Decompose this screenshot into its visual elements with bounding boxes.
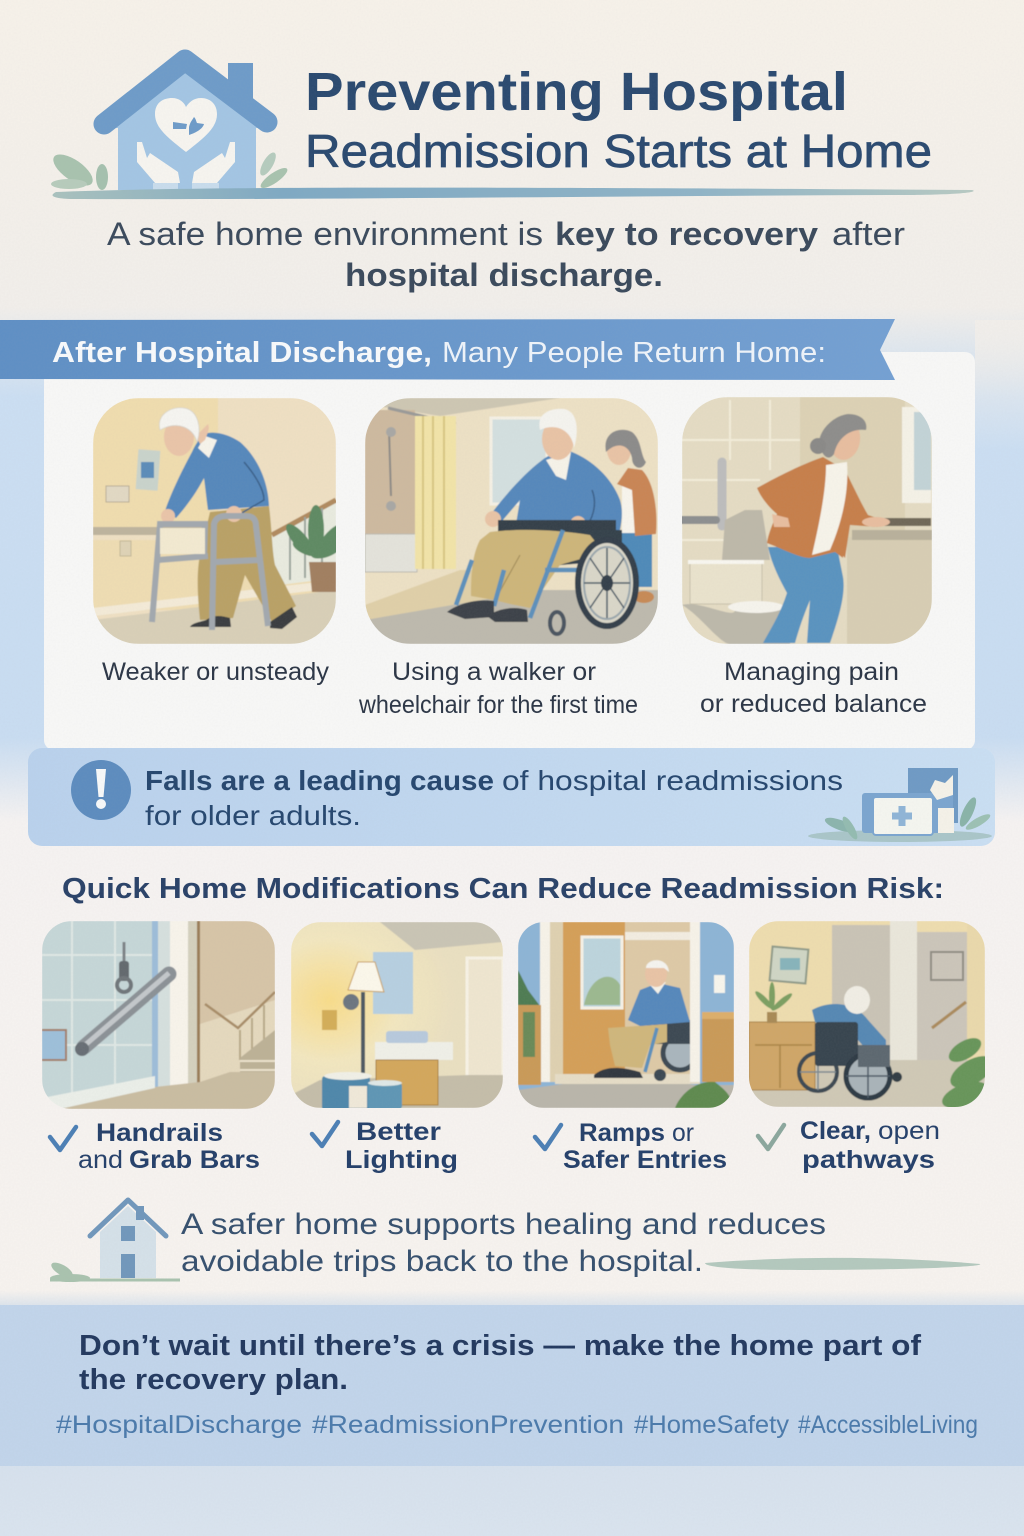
benefit: ramps or safer entries: Ramps	[579, 1119, 665, 1147]
caption: walker or wheelchair: wheelchair for the first time	[358, 691, 638, 719]
section ribbon	[0, 319, 895, 380]
icon: medical kit	[808, 768, 992, 842]
illustration: better lighting	[291, 922, 503, 1110]
benefit: better lighting	[312, 1118, 458, 1174]
decorative brush	[705, 1258, 980, 1270]
header underline brush	[53, 188, 974, 199]
benefit: ramps or safer entries: Safer Entries	[563, 1146, 727, 1174]
benefit: ramps or safer entries	[535, 1119, 727, 1174]
icon: small house	[49, 1200, 180, 1282]
hashtags	[56, 1411, 978, 1439]
illustration: man in wheelchair with caregiver	[365, 398, 658, 644]
benefit: better lighting: Lighting	[345, 1146, 458, 1174]
icon: warning	[71, 760, 131, 820]
caption: weaker: Weaker or unsteady	[102, 658, 329, 686]
subtitle: after	[832, 216, 905, 252]
benefit: ramps or safer entries: or	[672, 1119, 694, 1147]
illustration: man with walker	[93, 398, 348, 644]
call to action: the recovery plan.	[79, 1364, 348, 1396]
title: Preventing Hospital	[305, 62, 848, 122]
safer home statement: A safer home supports healing and reduces	[181, 1208, 826, 1241]
subtitle: A safe home environment is	[107, 216, 543, 252]
subtitle: hospital discharge.	[345, 257, 663, 293]
section ribbon: Many People Return Home:	[442, 337, 826, 369]
title	[305, 62, 932, 177]
subtitle	[107, 216, 905, 293]
title: Readmission Starts at Home	[305, 125, 932, 177]
subtitle: key to recovery	[555, 216, 818, 252]
heading: quick modifications: Quick Home Modifications Can Reduce Readmission Risk:	[62, 873, 944, 905]
caption: managing pain	[700, 658, 927, 718]
safer home statement: avoidable trips back to the hospital.	[181, 1245, 703, 1278]
illustration: handrails and grab bars	[42, 921, 275, 1109]
benefit: clear open pathways: Clear,	[800, 1117, 871, 1145]
callout: falls	[28, 748, 995, 846]
panel: after discharge	[44, 352, 975, 750]
caption: walker or wheelchair	[358, 658, 638, 719]
benefit: handrails and grab bars	[50, 1119, 260, 1174]
benefit: handrails and grab bars: Handrails	[96, 1119, 223, 1147]
benefit: clear open pathways: open	[878, 1117, 940, 1145]
hashtags: #HospitalDischarge	[56, 1411, 302, 1439]
hashtags: #HomeSafety	[634, 1411, 790, 1439]
caption: walker or wheelchair: Using a walker or	[392, 658, 596, 686]
caption: managing pain: or reduced balance	[700, 690, 927, 718]
callout text: Falls are a leading cause	[145, 765, 494, 796]
call to action	[79, 1330, 921, 1396]
header: house logo	[48, 60, 290, 191]
benefit: handrails and grab bars: Grab Bars	[129, 1146, 260, 1174]
benefit: better lighting: Better	[356, 1118, 441, 1146]
footer banner	[0, 1305, 1024, 1466]
hashtags: #ReadmissionPrevention	[312, 1411, 624, 1439]
safer home statement	[181, 1208, 826, 1278]
illustration: clear pathways	[749, 921, 999, 1114]
illustration: ramps and safer entries	[518, 922, 734, 1108]
callout text	[145, 765, 843, 831]
benefit: handrails and grab bars: and	[78, 1146, 123, 1174]
illustration: woman with pain at counter	[682, 397, 932, 644]
benefit: clear open pathways: pathways	[802, 1146, 935, 1174]
call to action: Don’t wait until there’s a crisis — make the home part of	[79, 1330, 921, 1362]
callout text: of hospital readmissions	[502, 765, 843, 796]
section ribbon: After Hospital Discharge,	[52, 337, 432, 369]
callout text: for older adults.	[145, 800, 361, 831]
benefit: clear open pathways	[758, 1117, 940, 1174]
caption: managing pain: Managing pain	[724, 658, 899, 686]
hashtags: #AccessibleLiving	[798, 1411, 978, 1439]
